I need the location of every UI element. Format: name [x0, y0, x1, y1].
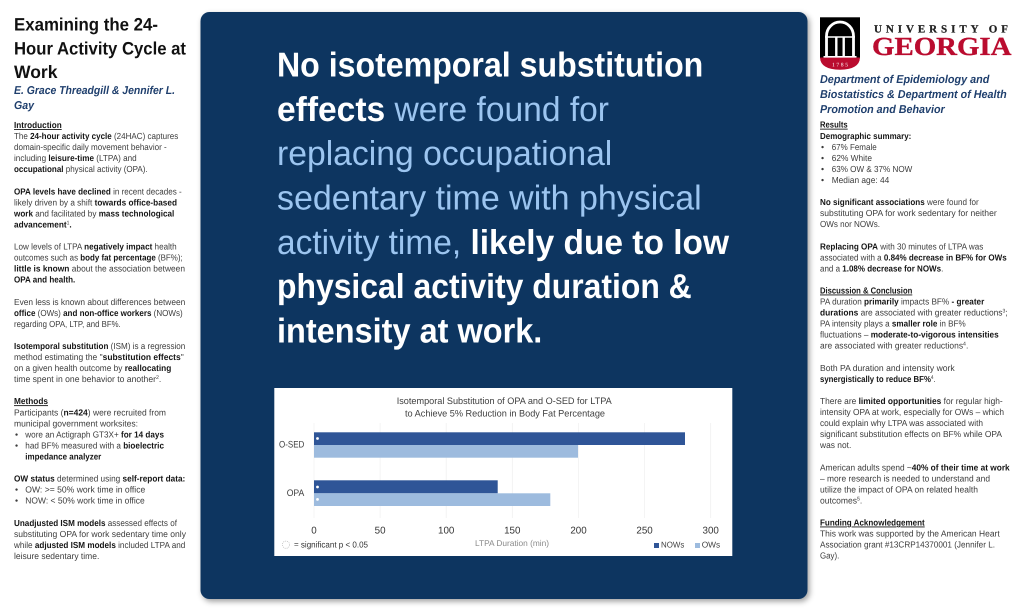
- text: OPA levels: likely driven by a shift towards office-based: [14, 197, 177, 207]
- text: limited opportunities: There are limited opportunities for regular high-: [820, 396, 1003, 406]
- text: participants: wore an Actigraph GT3X+ for 14 days: [24, 429, 164, 439]
- text: replacing OPA: and a 1.08% decrease for NOWs.: [820, 263, 943, 273]
- text: PA duration and intensity: PA duration primarily impacts BF% - greater: [820, 296, 985, 306]
- text: no significant associations: OWs nor NOWs.: [820, 219, 880, 229]
- text: participants: Participants (n=424) were recruited from: [14, 407, 166, 417]
- text: PA duration and intensity: PA intensity plays a smaller role in BF%: [820, 319, 966, 329]
- category group: O-SED: O-SED: [279, 440, 304, 451]
- right column: logo, department, results and discussion: [819, 17, 1012, 561]
- heading: methods: Methods: [14, 396, 48, 406]
- text: office workers: [14, 297, 185, 329]
- text: office workers: office (OWs) and non-office workers (NOWs): [14, 308, 183, 318]
- text: office workers: regarding OPA, LTP, and BF%.: [14, 319, 121, 329]
- text: OPA levels: 1: [67, 220, 69, 226]
- panel: main finding: [200, 12, 808, 599]
- text: limited opportunities: was not.: [819, 440, 851, 450]
- heading: funding acknowledgement: Funding Acknowledgement: [820, 518, 925, 528]
- key finding statement: physical activity duration &: [277, 268, 692, 306]
- text: ISM models: substituting OPA for work sedentary time only: [14, 529, 187, 539]
- text: 24-hour activity cycle: [14, 131, 179, 174]
- text: limited opportunities: intensity OPA at work, especially for OWs – which: [820, 407, 1004, 417]
- text: funding: Association grant #13CRP14370001 (Jennifer L.: [820, 540, 995, 550]
- text: LTPA and health: Low levels of LTPA negatively impact health: [14, 242, 177, 252]
- left column: title, authors, introduction and methods: [13, 15, 187, 561]
- x-axis tick labels: 50: [375, 525, 386, 536]
- text: PA duration and intensity: fluctuations – moderate-to-vigorous intensities: [820, 330, 999, 340]
- text: demographic summary: •: [821, 142, 824, 152]
- title: [14, 15, 186, 82]
- text: OW status: OW status determined using self-report data:: [14, 474, 185, 484]
- text: time at work: 5: [857, 496, 860, 502]
- department heading: Department of Epidemiology and: [820, 74, 990, 86]
- text: limited opportunities: [819, 396, 1004, 450]
- text: synergistic effect: .: [934, 374, 936, 384]
- text: LTPA and health: outcomes such as body fat percentage (BF%);: [14, 253, 183, 263]
- text: replacing OPA: Replacing OPA with 30 minutes of LTPA was: [820, 241, 984, 251]
- text: time at work: utilize the impact of OPA on related health: [820, 484, 978, 494]
- text: time at work: .: [860, 495, 862, 505]
- text: time at work: American adults spend ~40% of their time at work: [820, 462, 1010, 472]
- text: OPA levels: work and facilitated by mass technological: [13, 208, 174, 218]
- chart title: [397, 395, 612, 419]
- text: demographic summary: [820, 131, 913, 185]
- text: replacing OPA: associated with a 0.84% decrease in BF% for OWs: [820, 252, 1007, 262]
- key finding statement: sedentary time with physical: [277, 180, 702, 218]
- text: no significant associations: [820, 197, 997, 229]
- text: isotemporal substitution: .: [159, 374, 161, 384]
- category group: OPA: [287, 480, 550, 506]
- logo: University of Georgia: UNIVERSITY OF: [874, 23, 1008, 35]
- text: LTPA and health: little is known about the association between: [14, 264, 185, 274]
- text: ISM models: Unadjusted ISM models assessed effects of: [14, 518, 178, 528]
- text: LTPA and health: [14, 242, 185, 285]
- text: OPA levels: .: [69, 220, 72, 230]
- heading: results: Results: [820, 120, 848, 130]
- text: demographic summary: 62% White: [832, 153, 872, 163]
- text: no significant associations: substituting OPA for work sedentary for neither: [820, 208, 997, 218]
- x-axis title: LTPA Duration (min): [475, 538, 549, 548]
- text: funding: [820, 529, 1000, 561]
- text: limited opportunities: significant substitution effects on BF% while OPA: [820, 429, 1002, 439]
- text: funding: Gay).: [820, 551, 839, 561]
- logo: University of Georgia: [820, 17, 1012, 70]
- chart title: to Achieve 5% Reduction in Body Fat Percentage: [405, 408, 605, 419]
- text: office workers: Even less is known about differences between: [14, 297, 185, 307]
- text: demographic summary: 63% OW & 37% NOW: [832, 164, 913, 174]
- text: 24-hour activity cycle: occupational physical activity (OPA).: [14, 164, 148, 174]
- text: ISM models: [13, 518, 187, 561]
- x-axis tick labels: 0: [311, 525, 317, 536]
- text: OPA levels: OPA levels have declined in recent decades -: [14, 186, 182, 196]
- text: demographic summary: Median age: 44: [832, 175, 889, 185]
- key finding statement: intensity at work.: [277, 313, 542, 351]
- department heading: Promotion and Behavior: [820, 104, 945, 116]
- x-axis tick labels: 250: [636, 525, 653, 536]
- text: no significant associations: No significant associations were found for: [820, 197, 979, 207]
- text: participants: had BF% measured with a bioelectric: [25, 440, 164, 450]
- text: ISM models: leisure sedentary time.: [14, 551, 99, 561]
- x-axis tick labels: 200: [570, 525, 587, 536]
- title: Work: [14, 62, 58, 82]
- text: OW status: NOW: < 50% work time in office: [25, 496, 145, 506]
- text: ISM models: while adjusted ISM models included LTPA and: [13, 540, 185, 550]
- text: PA duration and intensity: are associated with greater reductions: [820, 341, 969, 351]
- chart title: Isotemporal Substitution of OPA and O-SED for LTPA: [397, 395, 612, 406]
- text: 24-hour activity cycle: domain-specific daily movement behavior -: [14, 142, 167, 152]
- authors: [14, 85, 175, 112]
- text: isotemporal substitution: 2: [156, 375, 159, 381]
- text: time at work: [820, 462, 1010, 505]
- category group: OPA: OPA: [287, 488, 305, 499]
- text: 24-hour activity cycle: including leisure-time (LTPA) and: [14, 153, 137, 163]
- authors: Gay: [14, 100, 35, 112]
- x-axis tick labels: 300: [703, 525, 719, 536]
- key finding statement: [277, 47, 729, 351]
- text: PA duration and intensity: .: [966, 341, 968, 351]
- text: PA duration and intensity: durations are associated with greater reductions: [820, 308, 1009, 318]
- text: isotemporal substitution: Isotemporal substitution (ISM) is a regression: [14, 341, 185, 351]
- text: isotemporal substitution: on a given health outcome by reallocating: [14, 363, 171, 373]
- text: synergistic effect: 4: [931, 375, 934, 381]
- department heading: Biostatistics & Department of Health: [820, 89, 1007, 101]
- x-axis tick labels: 150: [504, 525, 521, 536]
- text: synergistic effect: Both PA duration and intensity work: [820, 363, 955, 373]
- significance key: = significant p < 0.05: [294, 539, 368, 549]
- text: 24-hour activity cycle: The 24-hour activity cycle (24HAC) captures: [14, 131, 179, 141]
- text: OW status: •: [15, 485, 18, 495]
- x-axis tick labels: 100: [438, 525, 455, 536]
- text: OW status: [14, 474, 185, 506]
- text: participants: •: [15, 429, 18, 439]
- title: Examining the 24-: [14, 15, 158, 35]
- text: OPA levels: [13, 186, 182, 230]
- legend: OWs: [702, 540, 720, 550]
- title: Hour Activity Cycle at: [14, 38, 186, 58]
- heading: introduction: Introduction: [14, 120, 62, 130]
- text: participants: •: [15, 440, 18, 450]
- text: time at work: outcomes: [820, 495, 858, 505]
- text: OW status: •: [15, 496, 18, 506]
- category group: O-SED: [279, 432, 685, 458]
- text: PA duration and intensity: 4: [963, 342, 966, 348]
- text: participants: [14, 407, 166, 462]
- text: synergistic effect: synergistically to reduce BF%: [820, 374, 931, 384]
- logo: University of Georgia: 1785: [832, 62, 848, 68]
- text: demographic summary: Demographic summary:: [820, 131, 911, 141]
- key finding statement: replacing occupational: [277, 135, 612, 173]
- text: isotemporal substitution: time spent in one behavior to another: [14, 374, 159, 384]
- text: participants: municipal government worksites:: [14, 418, 138, 428]
- chart: isotemporal substitution bar chart: [274, 388, 732, 556]
- text: synergistic effect: [820, 363, 955, 384]
- text: isotemporal substitution: method estimating the "substitution effects": [14, 352, 184, 362]
- text: LTPA and health: OPA and health.: [14, 275, 75, 285]
- authors: E. Grace Threadgill & Jennifer L.: [14, 85, 175, 97]
- text: PA duration and intensity: ;: [1005, 308, 1008, 318]
- text: funding: This work was supported by the American Heart: [820, 529, 1000, 539]
- key finding statement: No isotemporal substitution: [277, 47, 703, 85]
- text: OPA levels: advancement: [14, 220, 67, 230]
- legend: NOWs: [661, 540, 684, 550]
- text: participants: impedance analyzer: [25, 452, 102, 462]
- heading: discussion and conclusion: Discussion & Conclusion: [820, 286, 912, 296]
- text: demographic summary: •: [821, 153, 824, 163]
- text: demographic summary: 67% Female: [832, 142, 877, 152]
- text: PA duration and intensity: 3: [1002, 309, 1005, 315]
- key finding statement: effects were found for: [277, 91, 609, 129]
- text: demographic summary: •: [821, 164, 824, 174]
- logo: University of Georgia: GEORGIA: [872, 32, 1012, 61]
- text: time at work: – more research is needed to understand and: [820, 473, 990, 483]
- text: PA duration and intensity: [820, 296, 1008, 351]
- text: replacing OPA: [820, 241, 1007, 273]
- x-axis tick labels: [311, 525, 719, 536]
- text: OW status: OW: >= 50% work time in office: [25, 485, 145, 495]
- text: demographic summary: •: [821, 175, 824, 185]
- legend: [654, 540, 720, 550]
- key finding statement: activity time, likely due to low: [277, 224, 729, 262]
- department heading: [820, 74, 1007, 116]
- text: limited opportunities: could explain why LTPA was associated with: [820, 418, 983, 428]
- text: isotemporal substitution: [14, 341, 185, 384]
